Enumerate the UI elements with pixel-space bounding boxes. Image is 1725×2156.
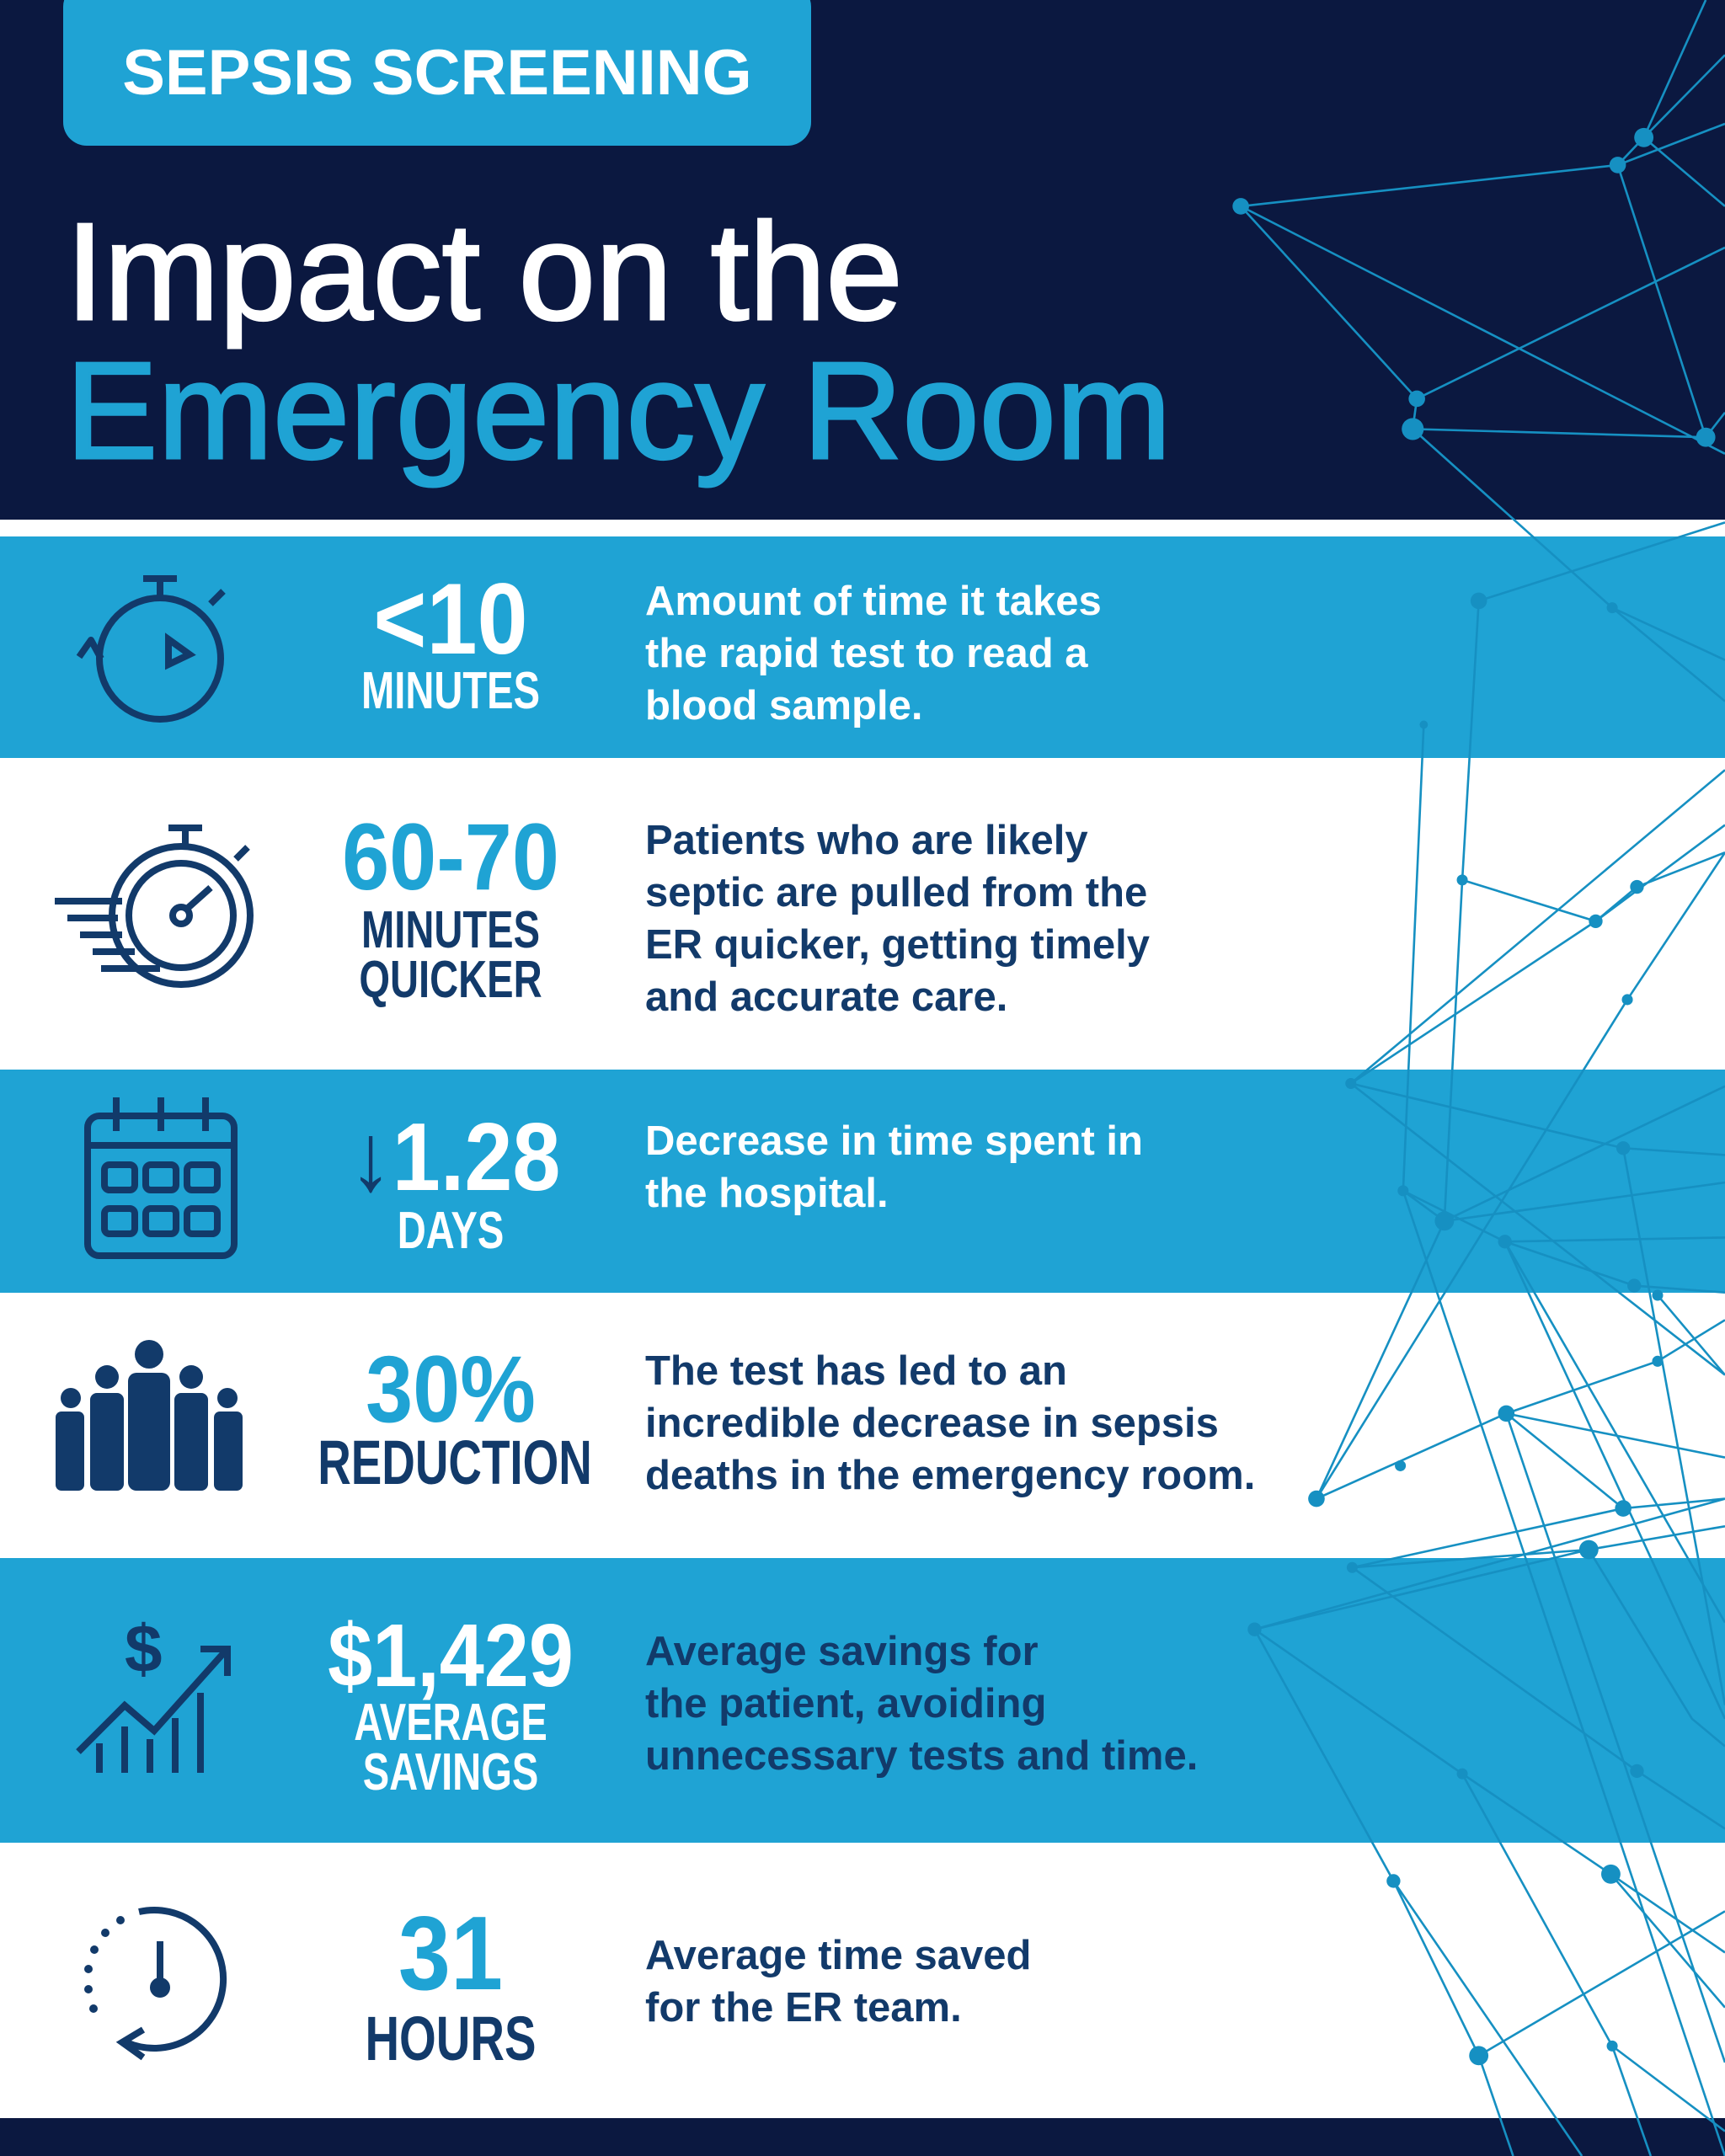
header background <box>0 0 1725 520</box>
description 5 <box>645 1629 1198 1779</box>
bands <box>0 536 1725 758</box>
number: 30% reduction <box>318 1337 592 1497</box>
description 4: deaths in the emergency room. <box>645 1453 1255 1498</box>
row 1: rapid test time <box>76 575 226 723</box>
description 2: septic are pulled from the <box>645 870 1147 915</box>
row 3 <box>84 1097 238 1259</box>
description 4 <box>645 1348 1255 1498</box>
number: 30% reduction: 30% <box>366 1337 536 1442</box>
icon: people group <box>56 1340 243 1491</box>
number: 31 hours: HOURS <box>365 2004 537 2073</box>
number: $1,429 average savings: AVERAGE <box>354 1694 547 1752</box>
tag: sepsis screening <box>63 0 811 146</box>
number: $1,429 average savings: $1,429 <box>328 1606 574 1705</box>
number: $1,429 average savings: SAVINGS <box>363 1743 538 1801</box>
title: Impact on the <box>66 195 903 349</box>
tag: sepsis screening: SEPSIS SCREENING <box>122 37 752 109</box>
row 4 <box>56 1340 243 1491</box>
number: 60-70 minutes quicker: MINUTES <box>361 901 540 959</box>
footer bar <box>0 2118 1725 2156</box>
number: 31 hours <box>365 1896 537 2073</box>
icon: growth chart with dollar: $ <box>125 1611 162 1686</box>
number: 1.28 days: DAYS <box>398 1202 504 1260</box>
description 1: blood sample. <box>645 683 922 728</box>
number: 1.28 days <box>349 1104 560 1260</box>
icon: clock with return arrow <box>84 1907 227 2060</box>
description 2 <box>645 818 1150 1020</box>
description 2: ER quicker, getting timely <box>645 922 1150 968</box>
description 6 <box>645 1933 1031 2031</box>
description 4: The test has led to an <box>645 1348 1067 1394</box>
number: 60-70 minutes quicker: 60-70 <box>342 804 559 910</box>
row 2 <box>55 825 254 988</box>
number: 30% reduction: REDUCTION <box>318 1428 592 1497</box>
description 4: incredible decrease in sepsis <box>645 1401 1219 1446</box>
row 6 <box>84 1907 227 2060</box>
description 5: Average savings for <box>645 1629 1039 1674</box>
icon: growth chart with dollar <box>76 1611 231 1773</box>
description 6: Average time saved <box>645 1933 1031 1978</box>
description 2: and accurate care. <box>645 974 1007 1020</box>
description 1: the rapid test to read a <box>645 631 1088 676</box>
description 5: the patient, avoiding <box>645 1681 1046 1726</box>
number: 60-70 minutes quicker <box>342 804 559 1009</box>
number: 1.28 days: ↓1.28 <box>349 1104 560 1211</box>
description 3: Decrease in time spent in <box>645 1118 1143 1164</box>
description 3 <box>645 1118 1143 1216</box>
number: 60-70 minutes quicker: QUICKER <box>359 951 542 1009</box>
description 2: Patients who are likely <box>645 818 1088 863</box>
row 5 <box>76 1611 231 1773</box>
description 1: Amount of time it takes <box>645 579 1102 624</box>
number: <10 minutes: <10 <box>373 563 528 675</box>
description 1 <box>645 579 1102 728</box>
title <box>66 195 1171 488</box>
description 3: the hospital. <box>645 1171 889 1216</box>
description 6: for the ER team. <box>645 1985 962 2031</box>
icon: stopwatch with arrow <box>76 575 226 723</box>
title: Emergency Room <box>66 334 1171 488</box>
number: $1,429 average savings <box>328 1606 574 1801</box>
number: <10 minutes: MINUTES <box>361 662 540 720</box>
icon: calendar <box>84 1097 238 1259</box>
description 5: unnecessary tests and time. <box>645 1733 1198 1779</box>
icon: fast stopwatch <box>55 825 254 988</box>
number: 31 hours: 31 <box>398 1896 503 2012</box>
number: <10 minutes <box>361 563 540 720</box>
